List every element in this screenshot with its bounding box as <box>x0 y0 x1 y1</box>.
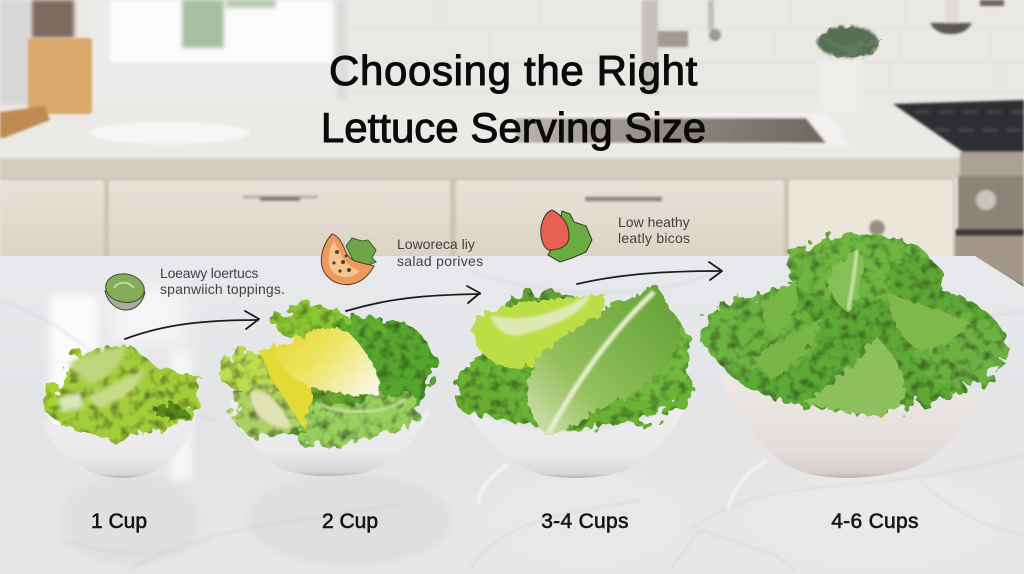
arrow 3 <box>577 262 722 284</box>
label: 3-4 cups: 3-4 Cups <box>541 510 629 533</box>
title <box>321 47 706 151</box>
icon: sandwich wrap <box>321 234 376 285</box>
note: 2 cup: salad porives <box>397 253 483 269</box>
note: 1 cup <box>160 265 285 297</box>
utensil crock and board <box>0 0 92 138</box>
bowl 2: 2 cup <box>218 305 435 476</box>
note: 2 cup: Loworeca liy <box>397 236 475 252</box>
label: 2 cup: 2 Cup <box>322 510 378 533</box>
marble countertop <box>0 256 1024 574</box>
title: Lettuce Serving Size <box>321 104 706 151</box>
faucet <box>642 0 721 94</box>
note: 3-4 cups: leatly bicos <box>618 230 690 246</box>
note: 1 cup: spanwiich toppings. <box>160 281 285 297</box>
sink <box>515 113 850 146</box>
icon: tomato and leaf <box>541 210 592 262</box>
bowl 4: 4-6 cups <box>702 234 1006 478</box>
title: Choosing the Right <box>329 47 698 94</box>
cabinets <box>0 177 955 260</box>
label: 1 cup: 1 Cup <box>91 510 147 533</box>
back counter <box>0 106 962 178</box>
arrow 1 <box>125 311 259 339</box>
icon: lettuce in bowl <box>105 274 145 310</box>
note: 2 cup <box>397 236 483 269</box>
bowl 3: 3-4 cups <box>456 285 693 478</box>
note: 3-4 cups <box>618 214 690 246</box>
plant pot <box>815 26 884 112</box>
hanging ladle <box>930 0 1004 34</box>
label: 4-6 cups: 4-6 Cups <box>831 510 919 533</box>
window <box>88 0 352 106</box>
stove <box>893 100 1024 296</box>
note: 3-4 cups: Low heathy <box>618 214 690 230</box>
bowl 1: 1 cup <box>42 345 200 478</box>
note: 1 cup: Loeawy loertucs <box>160 265 258 281</box>
wall <box>0 0 1024 112</box>
arrow 2 <box>346 286 480 311</box>
